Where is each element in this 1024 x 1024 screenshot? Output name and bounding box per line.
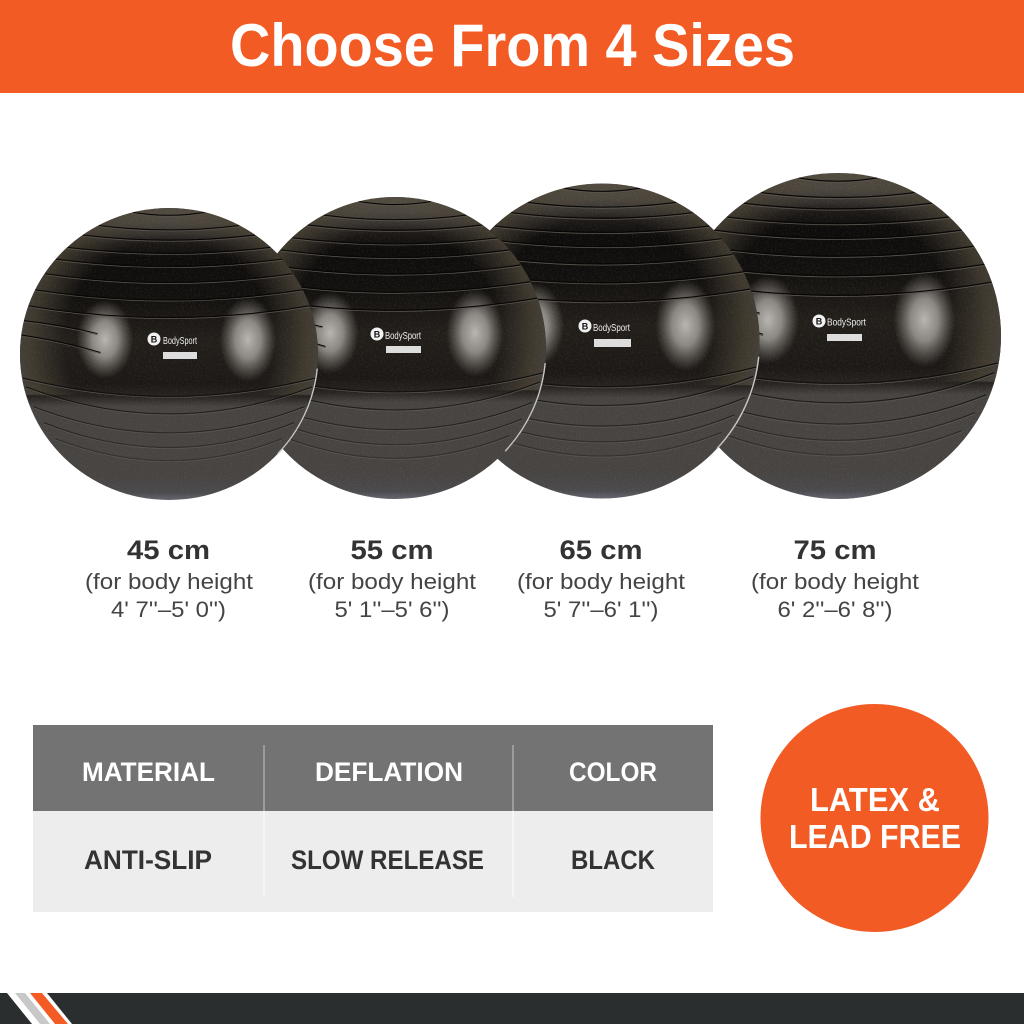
size label: 75 cm: 6' 2''–6' 8'') [778, 597, 892, 622]
size label: 45 cm: 4' 7''–5' 0'') [111, 597, 226, 622]
ball: 55 cm: B [374, 330, 381, 340]
title banner: Choose From 4 Sizes [230, 12, 795, 79]
badge: latex and lead free: LEAD FREE [789, 818, 961, 855]
table headers [82, 757, 657, 787]
title banner [0, 0, 1024, 93]
size label: 55 cm: 55 cm [350, 535, 434, 565]
size label: 75 cm: (for body height [751, 569, 919, 594]
table headers: MATERIAL [82, 757, 215, 787]
ball: 65 cm: BodySport [593, 322, 630, 334]
ball: 55 cm: BodySport [385, 330, 421, 342]
badge: latex and lead free: LATEX & [810, 781, 940, 818]
size label: 65 cm: 65 cm [560, 535, 642, 565]
size label: 75 cm: 75 cm [794, 535, 876, 565]
table headers: COLOR [569, 757, 657, 787]
ball: 75 cm: B [816, 316, 823, 326]
ball: 45 cm: BodySport [163, 335, 197, 347]
size label: 45 cm: (for body height [85, 569, 253, 594]
spec table [33, 725, 713, 912]
footer bar with stripes [0, 993, 1024, 1024]
size label: 55 cm: 5' 1''–5' 6'') [334, 597, 450, 622]
table values: ANTI-SLIP [84, 845, 212, 875]
size label: 45 cm [85, 535, 253, 622]
ball: 55 cm [244, 197, 546, 499]
ball: 45 cm: B [151, 334, 158, 344]
size label: 75 cm [751, 535, 919, 622]
ball: 65 cm [444, 184, 760, 498]
table headers: DEFLATION [315, 757, 463, 787]
ball: 75 cm [675, 173, 1001, 499]
size label: 55 cm: (for body height [308, 569, 476, 594]
table values: BLACK [571, 845, 655, 875]
table values [84, 845, 655, 875]
badge: latex and lead free [760, 704, 988, 932]
table values: SLOW RELEASE [291, 845, 484, 875]
size label: 45 cm: 45 cm [127, 535, 210, 565]
size label: 65 cm: (for body height [517, 569, 685, 594]
size label: 65 cm [517, 535, 685, 622]
ball: 45 cm [20, 208, 318, 500]
size label: 65 cm: 5' 7''–6' 1'') [544, 597, 658, 622]
ball: 75 cm: BodySport [827, 316, 866, 328]
ball: 65 cm: B [582, 322, 589, 332]
size label: 55 cm [308, 535, 476, 622]
